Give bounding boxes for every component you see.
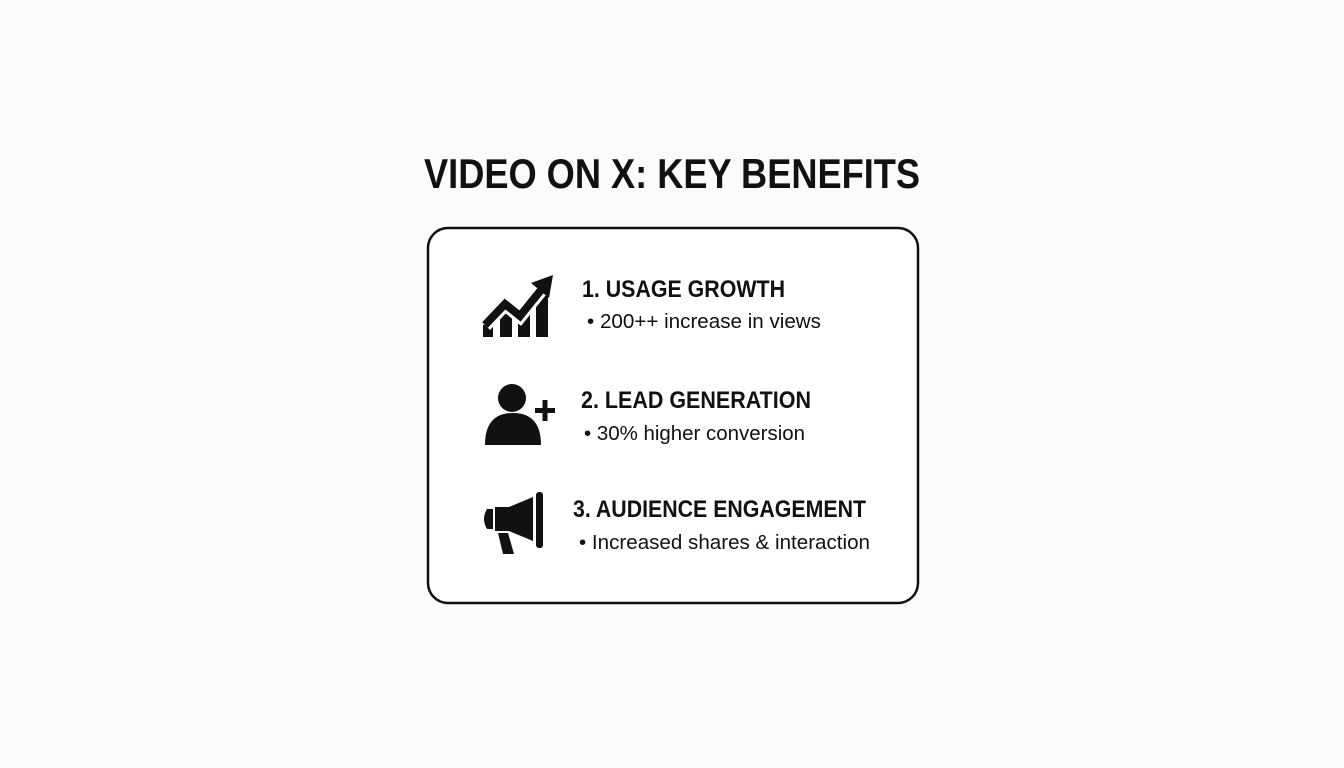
bullet: audience engagement: • Increased shares & interaction — [579, 532, 870, 554]
title: VIDEO ON X: KEY BENEFITS — [424, 150, 920, 197]
heading: usage growth: 1. USAGE GROWTH — [582, 276, 785, 303]
bullet: usage growth: • 200++ increase in views — [587, 311, 821, 333]
icon: growth chart — [483, 275, 553, 337]
icon: megaphone — [484, 492, 543, 554]
panel: benefits card — [428, 228, 918, 603]
heading: lead generation: 2. LEAD GENERATION — [581, 387, 811, 414]
icon: add user — [485, 384, 555, 445]
heading: audience engagement: 3. AUDIENCE ENGAGEMENT — [573, 496, 866, 523]
bullet: lead generation: • 30% higher conversion — [584, 423, 805, 445]
